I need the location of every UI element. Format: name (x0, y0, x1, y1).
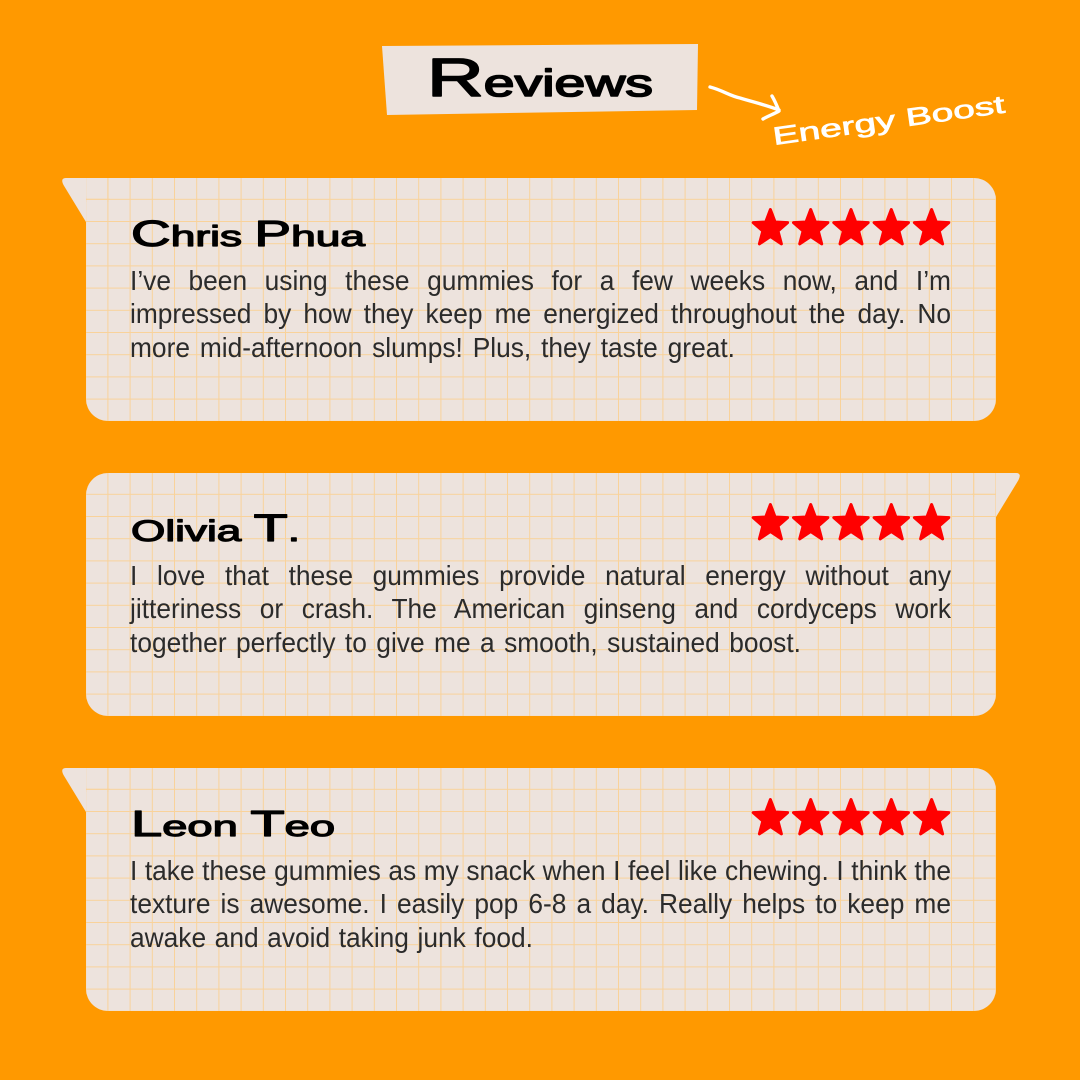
review text (130, 855, 951, 953)
review text: more mid-afternoon slumps! Plus, they taste great. (130, 332, 735, 363)
arrow (708, 85, 781, 121)
heading: Reviews label (382, 44, 698, 115)
panel: review Chris Phua (62, 178, 996, 421)
review text (130, 265, 951, 363)
star rating (753, 210, 949, 244)
review text: I take these gummies as my snack when I feel like chewing. I think the (130, 855, 951, 886)
review text: impressed by how they keep me energized throughout the day. No (130, 298, 951, 329)
review text: together perfectly to give me a smooth, sustained boost. (130, 627, 801, 658)
reviewer name: C hris P hua (131, 213, 366, 254)
panel: review Leon Teo (62, 768, 996, 1011)
review text: awake and avoid taking junk food. (130, 922, 533, 953)
reviewer name: L eon T eo (131, 803, 335, 844)
review text: jitteriness or crash. The American ginseng and cordyceps work (130, 593, 951, 624)
review text: texture is awesome. I easily pop 6-8 a day. Really helps to keep me (130, 888, 951, 919)
review text: I’ve been using these gummies for a few weeks now, and I’m (130, 265, 951, 296)
heading: Reviews label: R eviews (427, 48, 653, 108)
review text (129, 560, 951, 658)
review text: I love that these gummies provide natural energy without any (130, 560, 951, 591)
product label: Energy Boost: Energy Boost (771, 91, 1007, 151)
star rating (753, 504, 949, 539)
star rating (753, 800, 949, 834)
reviewer name: Olivia T . (131, 508, 300, 550)
panel: review Olivia T. (86, 473, 1020, 716)
